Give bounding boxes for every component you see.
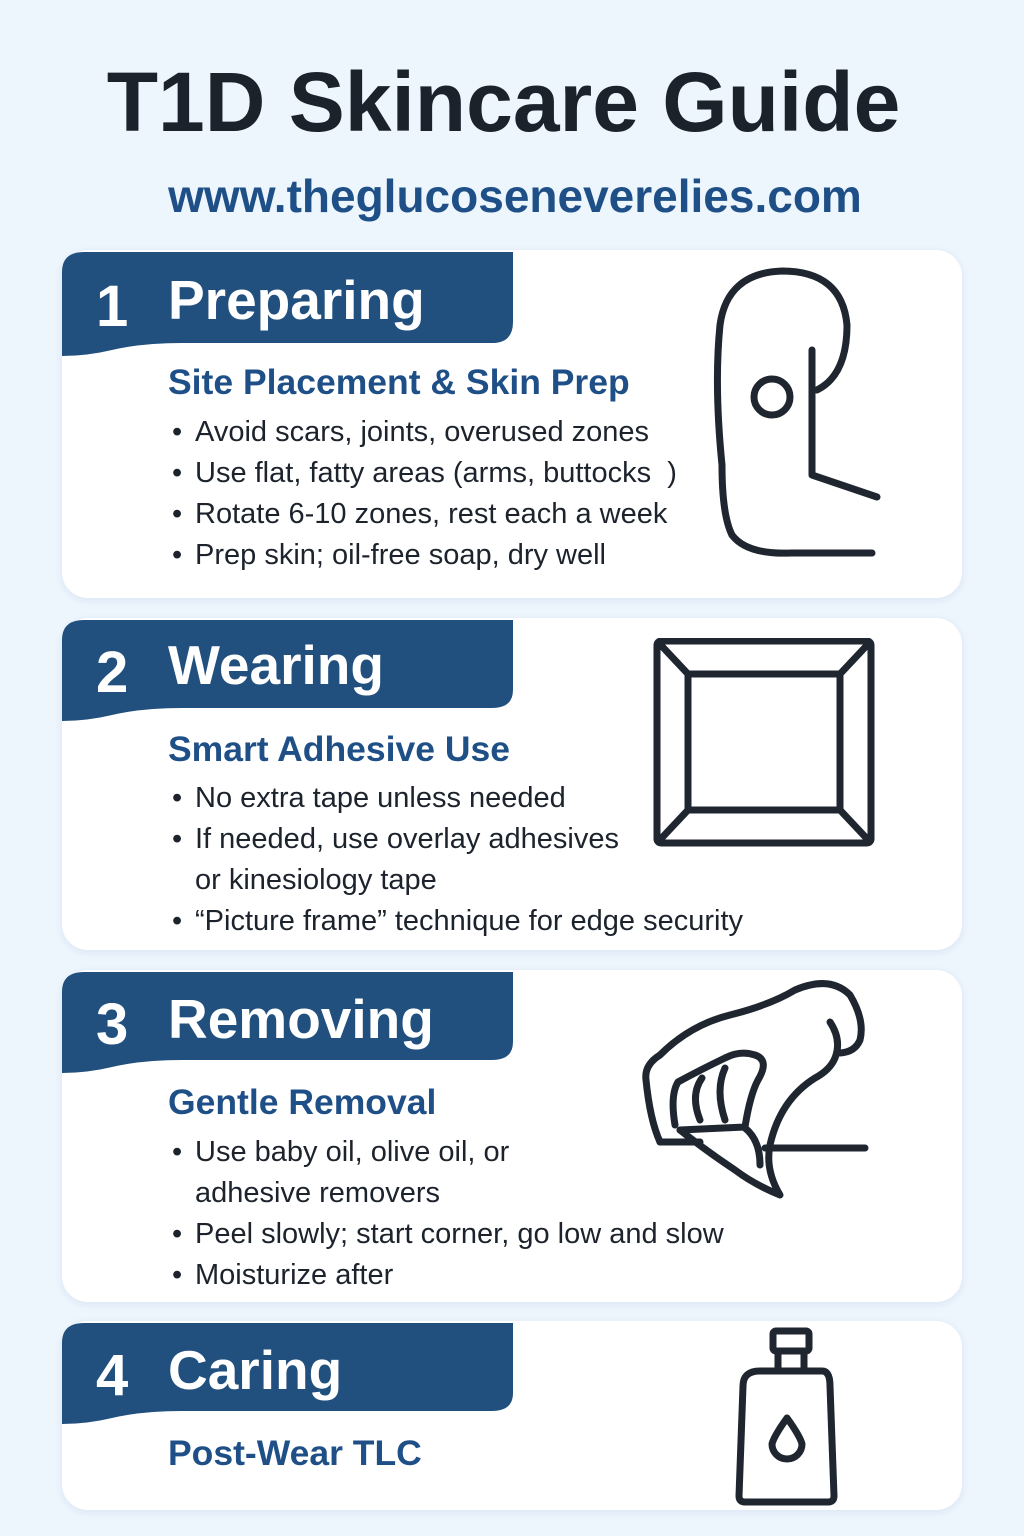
icon: lotion bottle: [736, 1328, 838, 1506]
bullets: [173, 416, 677, 571]
tab: wearing: [62, 620, 513, 721]
subheading: Gentle Removal: [168, 1082, 436, 1122]
heading: Caring: Caring: [168, 1339, 342, 1401]
bullets: adhesive removers: [195, 1177, 440, 1209]
bullets: [173, 1136, 724, 1291]
tab: preparing: [62, 252, 513, 356]
bullets: No extra tape unless needed: [195, 782, 566, 814]
bullets: Avoid scars, joints, overused zones: [195, 416, 649, 448]
subheading: Site Placement & Skin Prep: [168, 362, 630, 402]
bullets: Moisturize after: [195, 1259, 393, 1291]
bullets: “Picture frame” technique for edge security: [195, 905, 743, 937]
bullets: If needed, use overlay adhesives: [195, 823, 619, 855]
icon: hand peeling: [642, 980, 868, 1198]
tab: removing: [62, 972, 513, 1073]
subheading: Smart Adhesive Use: [168, 729, 510, 769]
tab: caring: [62, 1323, 513, 1424]
heading: Preparing: Preparing: [168, 269, 425, 331]
heading: Removing: Removing: [168, 988, 434, 1050]
panel: removing: [62, 970, 962, 1302]
panel: preparing: [62, 250, 962, 598]
bullets: or kinesiology tape: [195, 864, 437, 896]
number 1: 1: [96, 274, 128, 339]
number 2: 2: [96, 640, 128, 705]
panel: caring: [62, 1321, 962, 1510]
url: www.theglucoseneverelies.com: [168, 170, 862, 222]
bullets: Use baby oil, olive oil, or: [195, 1136, 509, 1168]
number 3: 3: [96, 992, 128, 1057]
panel: wearing: [62, 618, 962, 950]
heading: Wearing: Wearing: [168, 634, 384, 696]
bullets: Prep skin; oil-free soap, dry well: [195, 539, 606, 571]
bullets: Use flat, fatty areas (arms, buttocks ): [195, 457, 677, 489]
number 4: 4: [96, 1343, 128, 1408]
subheading: Post-Wear TLC: [168, 1433, 422, 1473]
icon: arm: [714, 268, 880, 557]
title: T1D Skincare Guide: [107, 55, 900, 149]
icon: picture frame: [654, 638, 874, 846]
bullets: [173, 782, 743, 937]
bullets: Rotate 6-10 zones, rest each a week: [195, 498, 667, 530]
bullets: Peel slowly; start corner, go low and slow: [195, 1218, 724, 1250]
